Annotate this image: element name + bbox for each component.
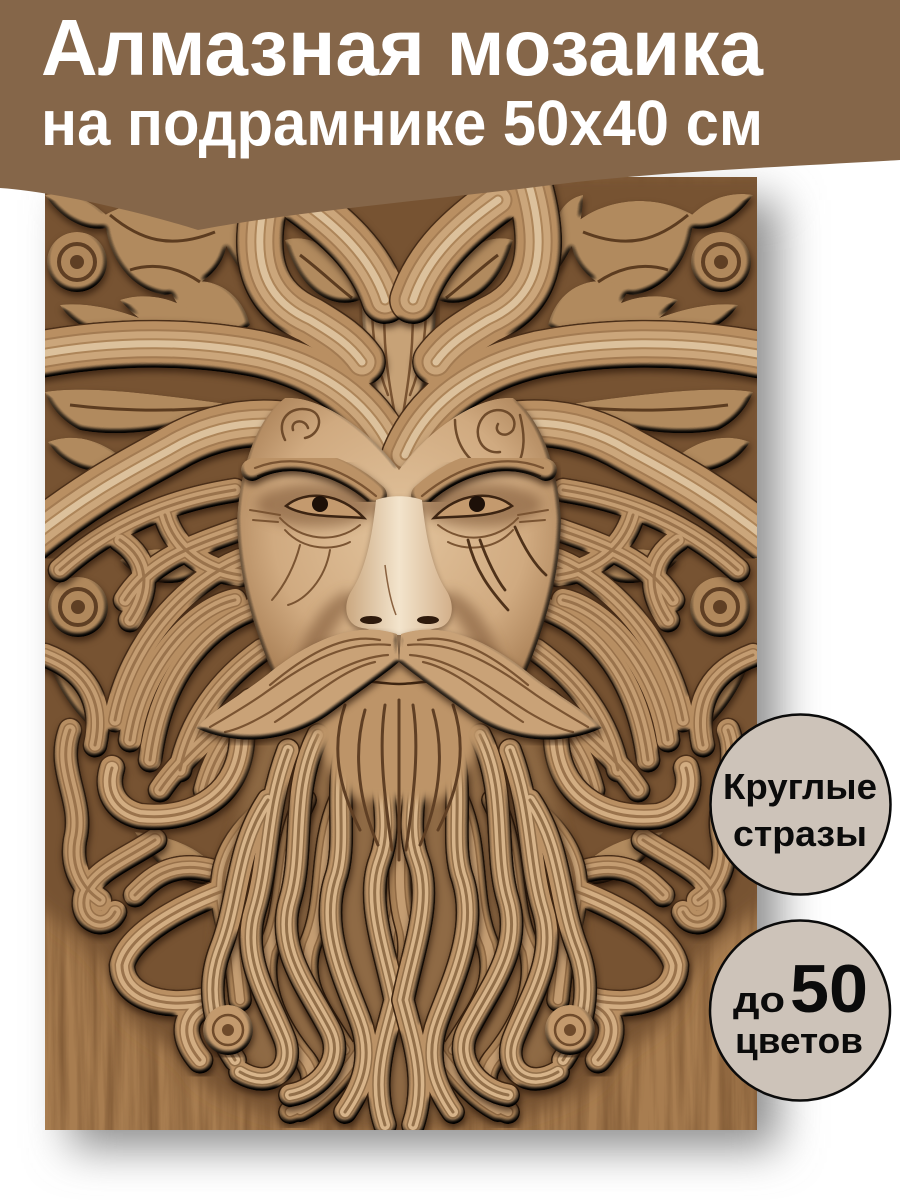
dark carved recess — [30, 170, 770, 1128]
beard knots — [203, 1005, 595, 1055]
badge: round rhinestones: стразы — [733, 813, 867, 854]
nostrils and folds — [360, 565, 439, 624]
tree branches — [30, 175, 768, 540]
title: Алмазная мозаика — [41, 3, 763, 92]
central trunk — [360, 304, 440, 416]
face — [234, 398, 566, 674]
badge: up to 50 colours: до — [733, 979, 785, 1020]
header banner — [0, 0, 900, 230]
painting: carved wooden forest spirit — [30, 170, 770, 1130]
chin and lips — [317, 664, 481, 860]
large lower curls — [110, 735, 688, 1060]
badge: round rhinestones — [710, 714, 890, 894]
badge: up to 50 colours: цветов — [735, 1020, 863, 1061]
eye sockets and irises — [286, 496, 512, 518]
mustache — [196, 630, 602, 740]
eye bags and wrinkles — [250, 510, 548, 610]
eye socket shading — [256, 483, 542, 680]
badge: up to 50 colours — [710, 920, 890, 1100]
badge: round rhinestones: Круглые — [723, 766, 877, 807]
beard underlay — [216, 720, 582, 1120]
badge: up to 50 colours: 50 — [790, 951, 868, 1027]
foliage leaves — [45, 194, 753, 884]
face shape — [234, 398, 566, 674]
beard locks — [213, 730, 585, 1125]
wood background — [45, 177, 757, 1130]
nose — [346, 496, 452, 635]
side hair locks — [45, 490, 753, 922]
extra beard locks — [234, 800, 564, 1112]
rosette spirals — [47, 232, 751, 637]
forehead marks — [280, 408, 525, 458]
eyebrows — [252, 460, 546, 500]
canvas drop shadow — [70, 200, 778, 1148]
subtitle: на подрамнике 50х40 см — [41, 87, 763, 159]
